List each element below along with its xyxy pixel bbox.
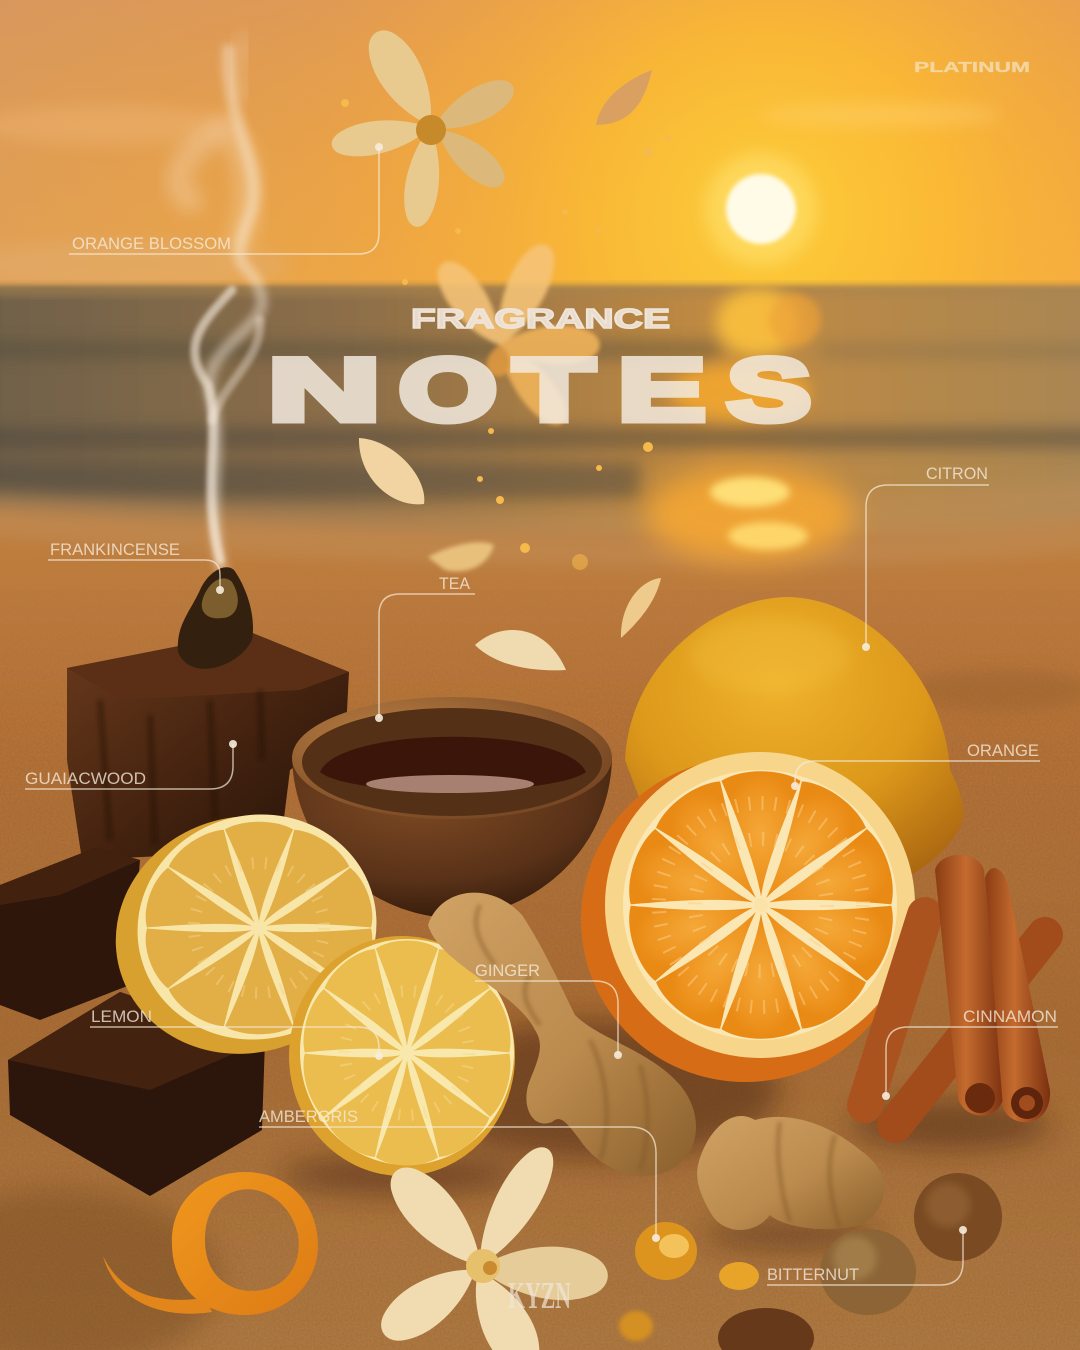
orange blossom flower, top: [329, 21, 521, 229]
ceramic tea bowl: [292, 697, 612, 918]
callout: cinnamon: CINNAMON: [963, 1007, 1057, 1026]
brand logo: KYZN: KYZN: [508, 1275, 571, 1317]
callout: orange: [791, 741, 1040, 790]
callout: citron: CITRON: [926, 464, 988, 483]
callout: frankincense: [48, 540, 224, 594]
callout: bitternut: [767, 1226, 967, 1285]
callout: orange: ORANGE: [967, 741, 1039, 760]
sun: [705, 153, 817, 265]
orange peel curl: [103, 1172, 318, 1315]
callout: bitternut: BITTERNUT: [767, 1265, 859, 1284]
callout: guaiacwood: [25, 740, 237, 789]
cinnamon sticks: [865, 855, 1050, 1125]
callout: ambergris: [259, 1107, 660, 1242]
title: NOTES: [268, 340, 811, 439]
tier label: PLATINUM: PLATINUM: [914, 59, 1030, 76]
blurred mid-air flower: [428, 237, 600, 433]
beach sand: [0, 467, 1080, 1350]
callout: cinnamon: [882, 1007, 1058, 1100]
lemon half slice, back: [89, 787, 402, 1083]
frankincense resin cone: [178, 567, 253, 669]
callout: tea: [375, 574, 475, 722]
callout: guaiacwood: GUAIACWOOD: [25, 769, 146, 788]
callout: ginger: [475, 961, 622, 1059]
dark wood blocks, left: [0, 848, 265, 1196]
callout: orange blossom: ORANGE BLOSSOM: [72, 234, 231, 253]
callout: tea: TEA: [439, 574, 471, 593]
petals drifting: [359, 70, 661, 670]
title: NOTES: O: [399, 340, 497, 439]
ginger root, small: [697, 1116, 884, 1230]
amber resin pieces: [619, 1222, 759, 1341]
title: FRAGRANCE: FRAGRANCE: [411, 303, 670, 334]
sunset sky: [0, 0, 1080, 305]
bitter nuts: [718, 1173, 1002, 1350]
guaiacwood block: [67, 632, 349, 860]
citron whole lemon: [625, 597, 963, 885]
title: NOTES: T: [514, 340, 594, 439]
lemon half slice, front: [289, 936, 516, 1176]
title: NOTES: S: [727, 340, 811, 439]
title: NOTES: E: [618, 340, 705, 439]
callout: frankincense: FRANKINCENSE: [50, 540, 180, 559]
orange half slice: [581, 752, 915, 1082]
ocean: [0, 284, 1080, 536]
object contact shadows: [280, 1020, 1050, 1249]
floating sparks: [341, 99, 671, 570]
callout: lemon: LEMON: [91, 1007, 152, 1026]
title: NOTES: N: [268, 340, 381, 439]
ginger root, long: [428, 893, 696, 1176]
orange blossom flower, bottom: [371, 1138, 610, 1350]
callout: ambergris: AMBERGRIS: [259, 1107, 358, 1126]
callout: ginger: GINGER: [475, 961, 540, 980]
callout: citron: [862, 464, 989, 651]
callout: lemon: [90, 1007, 383, 1060]
smoke plume: [179, 45, 262, 570]
callout: orange blossom: [69, 143, 383, 254]
